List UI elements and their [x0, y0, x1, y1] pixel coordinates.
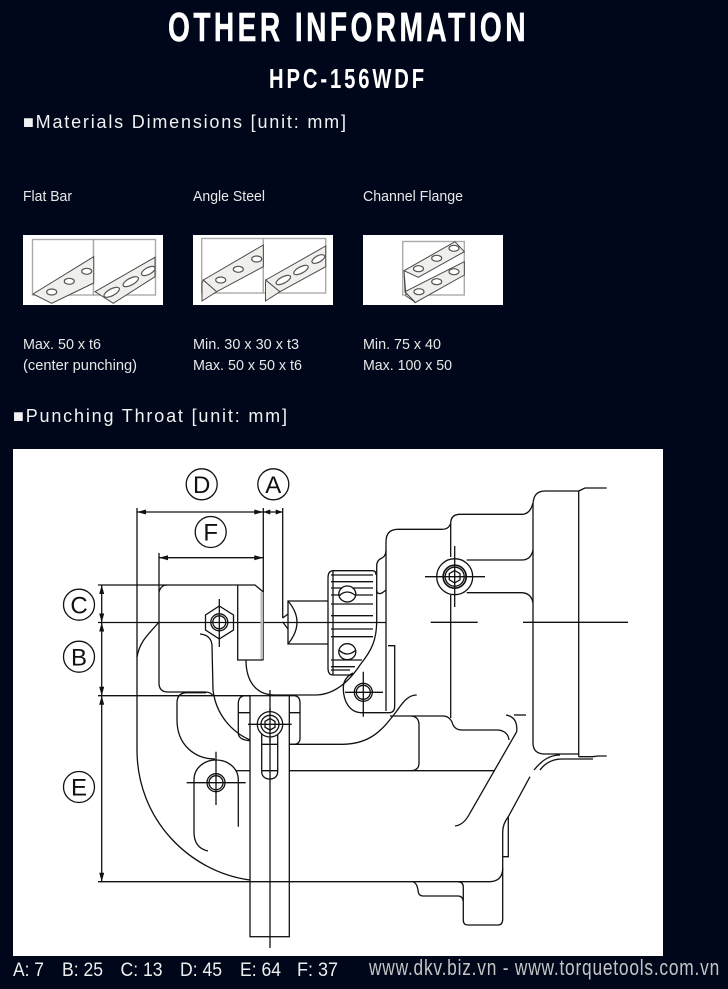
- text: angle steel limits: [193, 337, 302, 374]
- bolt: housing: [425, 546, 485, 607]
- diagram panel: punching throat: [13, 449, 663, 956]
- lower mount and bolt: [187, 752, 250, 851]
- callout: D: [186, 469, 217, 500]
- label: channel flange: Channel Flange: [363, 189, 463, 205]
- callout: C: [64, 589, 94, 620]
- dimension values legend: [13, 960, 338, 981]
- clevis: [238, 696, 300, 744]
- callout: E: E: [71, 775, 87, 802]
- text: channel flange limits: Min. 75 x 40: [363, 337, 441, 353]
- image: channel flange punching: [363, 235, 503, 305]
- punch: [238, 585, 263, 660]
- callout: B: B: [71, 644, 87, 671]
- mounting block and small bolt: [343, 646, 395, 717]
- subtitle: model number: HPC-156WDF: [269, 63, 427, 94]
- hex nut: [206, 599, 234, 647]
- image: flat bar punching: [23, 235, 163, 305]
- callout: F: [195, 516, 226, 548]
- callout: E: [64, 772, 94, 802]
- callout: A: [258, 469, 289, 500]
- body lower contours: [289, 695, 530, 925]
- text: channel flange limits: [363, 337, 452, 374]
- text: flat bar limits: [23, 337, 137, 374]
- dimension values legend: C: 13: [120, 960, 162, 981]
- dimension values legend: B: 25: [62, 960, 103, 981]
- dimension values legend: E: 64: [240, 960, 281, 981]
- text: flat bar limits: Max. 50 x t6: [23, 337, 101, 353]
- dimension lines: [98, 508, 628, 882]
- callout: B: [64, 641, 94, 672]
- callout: A: A: [265, 472, 281, 499]
- punch frame: [137, 585, 377, 759]
- heading: punching throat: ■Punching Throat [unit: mm]: [13, 406, 287, 426]
- callout: C: C: [70, 592, 88, 619]
- callout: D: D: [193, 472, 210, 499]
- dimension arrowheads: [99, 510, 283, 882]
- callout: F: F: [203, 520, 218, 547]
- dimension values legend: D: 45: [180, 960, 222, 981]
- text: angle steel limits: Max. 50 x 50 x t6: [193, 358, 302, 374]
- ram cylinder: [283, 601, 328, 644]
- heading: materials dimensions: ■Materials Dimensions [unit: mm]: [23, 112, 346, 132]
- text: angle steel limits: Min. 30 x 30 x t3: [193, 337, 299, 353]
- image: angle steel punching: [193, 235, 333, 305]
- text: flat bar limits: (center punching): [23, 358, 137, 374]
- label: angle steel: Angle Steel: [193, 189, 265, 205]
- knurled nut: [328, 571, 376, 675]
- text: channel flange limits: Max. 100 x 50: [363, 358, 452, 374]
- motor housing: [377, 488, 607, 770]
- label: flat bar: Flat Bar: [23, 189, 72, 205]
- blade bar with center line: [250, 690, 289, 948]
- slot and center bolt: [248, 708, 292, 779]
- dimension values legend: A: 7: [13, 960, 44, 981]
- title: OTHER INFORMATION: [168, 4, 529, 50]
- dimension values legend: F: 37: [297, 960, 338, 981]
